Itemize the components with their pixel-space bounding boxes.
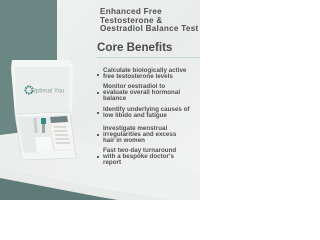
benefit 1: free testosterone levels — [103, 73, 173, 80]
benefit 5: Fast two-day turnaround — [103, 147, 176, 154]
benefit 4: irregularities and excess — [103, 131, 176, 138]
benefit 2: Monitor oestradiol to — [103, 83, 165, 90]
bullet 1 — [97, 74, 99, 76]
benefit 1: Calculate biologically active — [103, 67, 186, 74]
marble table — [0, 130, 200, 200]
box lid — [11, 60, 73, 116]
instruction sheet — [50, 116, 74, 150]
bullet 5 — [97, 156, 99, 158]
benefit 2: balance — [103, 95, 126, 102]
test card — [35, 137, 53, 152]
swab tube — [33, 118, 38, 133]
benefit 5: report — [103, 159, 121, 166]
benefit 2: evaluate overall hormonal — [103, 89, 180, 96]
benefit 3 — [103, 106, 190, 119]
benefit 4 — [103, 125, 176, 144]
wall: teal panel — [0, 0, 58, 200]
benefit 3: low libido and fatigue — [103, 112, 167, 119]
benefit 5 — [103, 147, 176, 166]
bullet 2 — [97, 92, 99, 94]
blood tube — [41, 118, 46, 133]
benefit 1 — [103, 67, 186, 80]
wall: light panel — [57, 0, 200, 200]
benefit 4: hair in women — [103, 137, 145, 144]
benefit 2 — [103, 83, 180, 102]
title: Testosterone & — [100, 16, 163, 25]
title: Enhanced Free — [100, 7, 162, 16]
bullet 3 — [97, 112, 99, 114]
benefit 3: Identify underlying causes of — [103, 106, 189, 113]
title: Oestradiol Balance Test — [100, 24, 199, 33]
box base — [15, 112, 76, 160]
benefit 5: with a bespoke doctor's — [103, 153, 174, 160]
heading: core benefits: Core Benefits — [97, 41, 172, 54]
bullet 4 — [97, 134, 99, 136]
brand logo: Optimal You — [31, 88, 65, 94]
divider — [97, 57, 200, 58]
benefit 4: Investigate menstrual — [103, 125, 167, 132]
background scene with product box — [0, 0, 200, 200]
product box — [11, 60, 76, 160]
title — [100, 7, 199, 33]
